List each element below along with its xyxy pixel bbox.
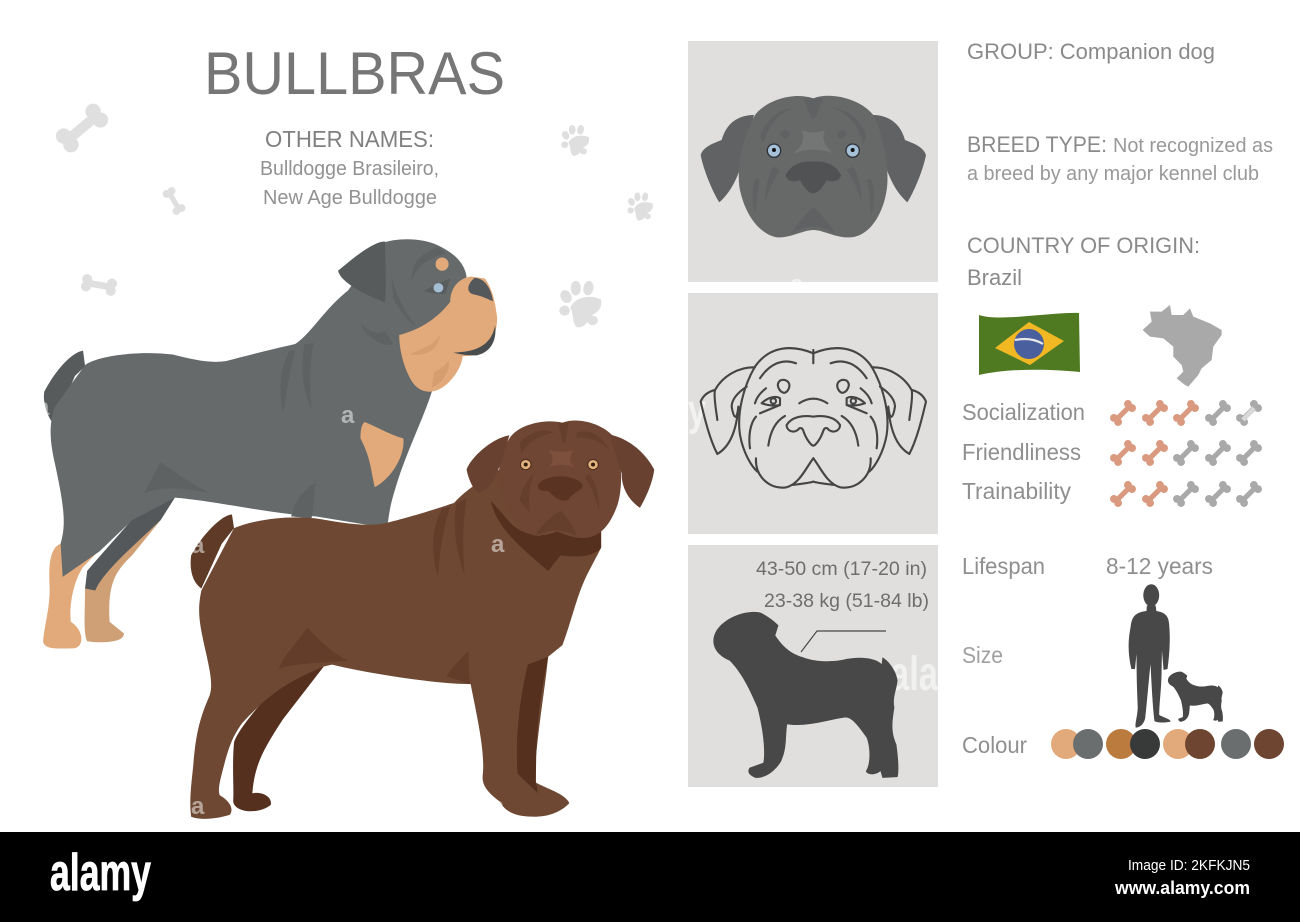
colour swatches	[962, 729, 1284, 759]
watermark letters on dogs: a	[191, 532, 205, 559]
rating: friendliness	[962, 439, 1262, 466]
watermark: a	[790, 271, 804, 298]
panel: grey head	[688, 41, 938, 298]
eyes	[767, 143, 781, 158]
size comparison: Size	[962, 642, 1003, 668]
rating: socialization: Socialization	[962, 399, 1085, 425]
panel: silhouette and measurements: 23-38 kg (51-84 lb)	[764, 590, 929, 612]
country of origin text	[967, 233, 1200, 290]
panel: silhouette and measurements	[688, 545, 938, 787]
rating: trainability	[962, 478, 1262, 507]
icon: map of Brazil	[1143, 305, 1222, 387]
lifespan	[962, 553, 1213, 579]
breed type text: BREED TYPE:	[967, 132, 1107, 157]
watermarks: ala	[890, 648, 938, 701]
other names: Bulldogge Brasileiro,	[260, 158, 439, 180]
watermark letters on dogs: a	[491, 531, 505, 558]
group text: GROUP: Companion dog	[967, 39, 1215, 64]
colour swatches: Colour	[962, 732, 1027, 758]
website: www.alamy.com	[1114, 878, 1250, 898]
watermark letters on dogs	[36, 394, 505, 820]
face	[739, 96, 888, 237]
icon: human silhouette	[1129, 584, 1171, 728]
decorative bones and paws	[55, 101, 653, 327]
lifespan: 8-12 years	[1106, 553, 1213, 579]
brown dog	[190, 421, 654, 819]
image id: Image ID: 2KFKJN5	[1128, 857, 1250, 874]
breed type text	[967, 132, 1273, 185]
size comparison	[962, 584, 1223, 728]
title: BULLBRAS	[204, 40, 505, 107]
other names: New Age Bulldogge	[263, 187, 437, 209]
ears	[701, 115, 926, 202]
measurements text: 43-50 cm (17-20 in)	[756, 558, 927, 580]
grey and tan dog	[43, 239, 497, 649]
watermark letters on dogs: a	[191, 793, 205, 820]
dog silhouette	[713, 612, 898, 778]
footer band	[0, 832, 1300, 922]
nose	[786, 161, 841, 193]
logo text: alamy	[50, 844, 151, 902]
icon: small dog silhouette	[1168, 672, 1223, 722]
breed type text: Not recognized as	[1113, 135, 1273, 157]
country of origin text: COUNTRY OF ORIGIN:	[967, 233, 1200, 258]
lifespan: Lifespan	[962, 553, 1045, 579]
icon: Brazilian flag	[979, 313, 1080, 375]
watermark letters on dogs: a	[36, 394, 50, 421]
rating: trainability: Trainability	[962, 478, 1071, 504]
breed type text: a breed by any major kennel club	[967, 163, 1259, 185]
rating: socialization	[962, 399, 1262, 426]
country of origin text: Brazil	[967, 265, 1022, 290]
rating: friendliness: Friendliness	[962, 439, 1081, 465]
other names	[260, 126, 439, 209]
watermark: y	[688, 386, 706, 435]
panel: line-art head	[688, 293, 938, 534]
watermark letters on dogs: a	[341, 402, 355, 429]
watermark letters on dogs: a	[491, 793, 505, 820]
height leader line	[801, 631, 886, 652]
other names: OTHER NAMES:	[265, 126, 434, 152]
